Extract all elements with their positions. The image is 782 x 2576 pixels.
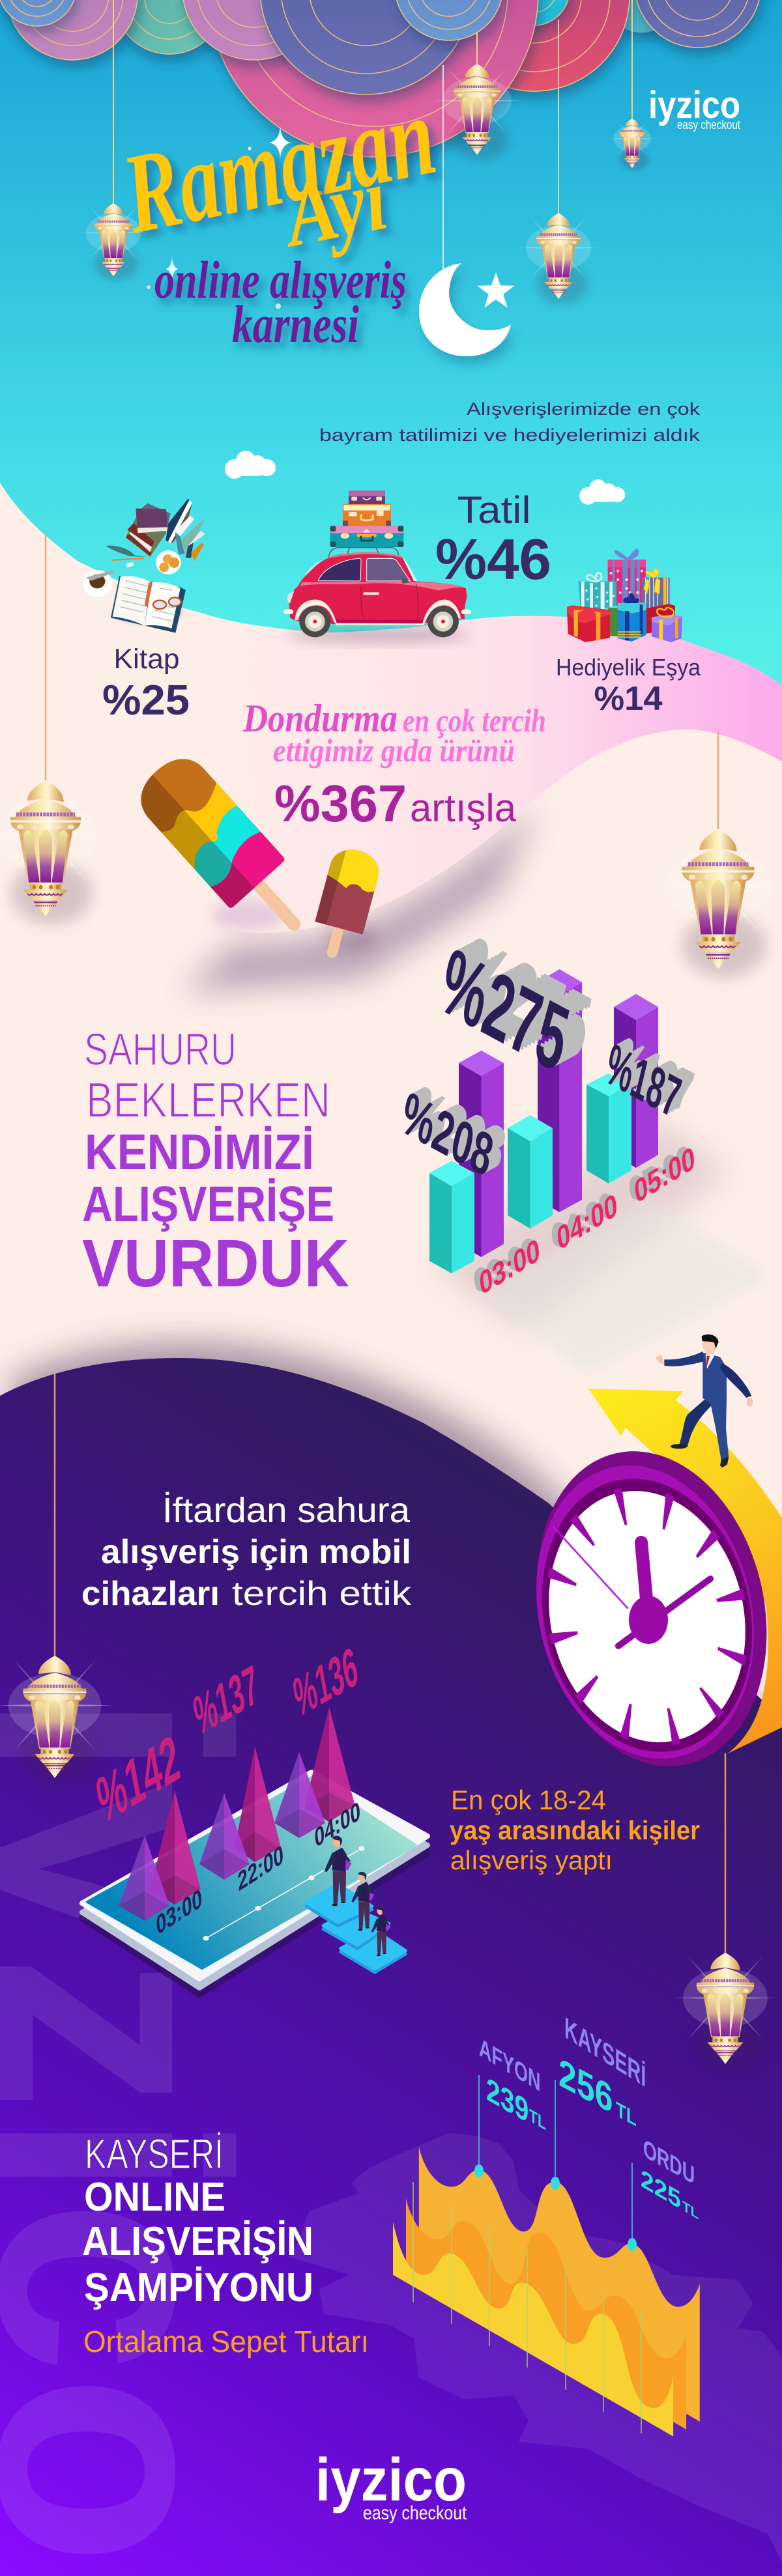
people on tiles [306, 1836, 406, 1972]
text block: age group: alışveriş yaptı [450, 1845, 613, 1875]
label: Kayseri: TL [616, 2097, 637, 2131]
label: Hediyelik Eşya: %14 [594, 680, 663, 718]
label: 04:00: 04:00 [555, 1186, 619, 1258]
label: Afyon: 239 [486, 2071, 529, 2130]
text block: ice cream stat: ettigimiz gıda ürünü [273, 732, 515, 769]
heading: sahur: KENDİMİZİ [85, 1124, 314, 1180]
label: Afyon [479, 2032, 546, 2134]
shadow: dark wave [10, 1341, 782, 1807]
title: online alışveriş [154, 250, 407, 309]
clock hands [553, 1527, 710, 1646]
red gift [567, 605, 610, 642]
icon: moon and star [419, 65, 515, 356]
front wave [393, 2222, 673, 2437]
phone body [82, 1772, 427, 1994]
pyramid purple front [119, 1835, 169, 1921]
icon: lantern 2 [433, 33, 521, 160]
label: Afyon: AFYON [479, 2032, 540, 2097]
icon: lantern right on wave [651, 731, 782, 978]
heading: Kayseri [82, 2130, 313, 2310]
label: Tatil: %46 [435, 527, 551, 591]
label: Kitap: %25 [102, 676, 190, 724]
value: %136: %136 [289, 1635, 362, 1729]
bar 05:00 purple [614, 994, 658, 1168]
icon: arrow [588, 1389, 782, 1753]
label: Kayseri [558, 2011, 646, 2131]
text block: ice cream stat: artışla [410, 786, 517, 830]
map silhouette [289, 2132, 782, 2562]
area chart: average basket [393, 2011, 700, 2437]
red back box [646, 604, 675, 634]
text block: iftar: İftardan sahura [162, 1491, 411, 1530]
label: Afyon: TL [529, 2106, 546, 2134]
heading: sahur: BEKLERKEN [86, 1073, 330, 1128]
text block: iftar: alışveriş için mobil [101, 1533, 411, 1571]
label: Ordu: ORDU [643, 2134, 695, 2190]
text block: ice cream stat: %367 [274, 774, 407, 832]
icon: books, coffee and glasses [83, 499, 205, 633]
icon: lantern left on wave [0, 534, 111, 924]
bar 04:00 teal [508, 1115, 553, 1228]
clock ticks [521, 1467, 774, 1766]
person 2 [351, 1872, 374, 1931]
label: Tatil [435, 489, 551, 591]
label: 03:00: 03:00 [155, 1882, 203, 1941]
value: %208: %208 [396, 1079, 499, 1190]
icon: popsicle large [141, 759, 301, 933]
guide lines [413, 2182, 641, 2433]
background wave: sky [0, 0, 782, 685]
title: karnesi [232, 294, 359, 354]
label: Ordu: TL [682, 2198, 699, 2222]
text block: age group: yaş arasındaki kişiler [450, 1815, 700, 1845]
text block: ice cream stat [242, 697, 546, 832]
value: %142: %142 [92, 1720, 184, 1838]
background wave: pink band [0, 391, 782, 933]
tile 1 [306, 1884, 372, 1926]
icon: popsicle small [315, 849, 379, 958]
shadow: pink wave [182, 806, 538, 992]
icon: lantern purple left [0, 1374, 113, 1785]
logo: iyzico bottom: easy checkout [363, 2502, 467, 2524]
value: %187: %187 [601, 1030, 686, 1131]
phone chart [82, 1635, 427, 1994]
bar 04:00 purple [538, 969, 582, 1212]
label: 04:00: 04:00 [313, 1795, 362, 1854]
label streaks [482, 1198, 769, 1374]
heading: sahur: SAHURU [84, 1024, 237, 1075]
icon: cloud right [579, 479, 625, 505]
icon: lantern 1 [79, 0, 148, 281]
green back box [608, 608, 621, 636]
teal star gift [579, 573, 616, 612]
heading: sahur: ALIŞVERİŞE [82, 1176, 334, 1232]
label: Hediyelik Eşya: Hediyelik Eşya [556, 654, 701, 681]
tile 3 [340, 1930, 406, 1972]
panel: dark purple background [0, 1358, 782, 2576]
bar 03:00 purple [459, 1051, 504, 1257]
label: Hediyelik Eşya [556, 654, 701, 718]
icon: businessman on arrow [656, 1335, 753, 1467]
car details [283, 552, 471, 625]
wheels [299, 606, 459, 637]
text block: iftar: cihazları [81, 1575, 220, 1613]
icon: red car with luggage [283, 490, 471, 643]
back wave [419, 2147, 700, 2422]
subtitle: Ortalama Sepet Tutarı [83, 2325, 369, 2358]
pyramid magenta mid [235, 1746, 281, 1862]
logo: iyzico top: iyzico [648, 84, 740, 126]
value: %275: %275 [432, 928, 577, 1092]
bar 05:00 teal [586, 1073, 631, 1183]
icon: cloud left [225, 451, 276, 479]
clock face [525, 1471, 770, 1762]
label: Tatil: Tatil [457, 489, 530, 531]
person 3 [371, 1907, 390, 1956]
heading: Kayseri: ŞAMPİYONU [84, 2265, 313, 2310]
heading: Kayseri: KAYSERİ [85, 2130, 224, 2177]
heading: Kayseri: ALIŞVERİŞİN [82, 2219, 313, 2264]
hanging paper circles [0, 0, 761, 157]
label: Kayseri: KAYSERİ [564, 2011, 646, 2094]
text block: iftar: tercih ettik [232, 1575, 412, 1613]
pyramid 04:00 front [274, 1752, 325, 1838]
value: %137: %137 [190, 1653, 262, 1747]
pyramid purple mid [199, 1793, 250, 1880]
bar chart: sahur hours [396, 928, 769, 1374]
label: Ordu: 225 [641, 2163, 681, 2215]
label: Ordu [641, 2134, 699, 2222]
pyramid magenta front [150, 1790, 201, 1904]
striped gift [642, 569, 670, 610]
text block: shopping intro: Alışverişlerimizde en çok [467, 399, 701, 419]
purple gift [652, 608, 682, 642]
icon: clock [506, 1428, 782, 1789]
dotted timeline [203, 1846, 365, 1941]
label: 05:00: 05:00 [632, 1139, 697, 1211]
text block: age group [450, 1785, 700, 1875]
icon: gift boxes [567, 548, 682, 642]
text block: shopping intro: bayram tatilimizi ve hediyelerimizi aldık [319, 425, 701, 445]
tile 2 [323, 1908, 389, 1949]
label: Kitap: Kitap [113, 644, 180, 675]
logo: iyzico bottom: iyzico [315, 2446, 467, 2513]
pins [474, 2075, 637, 2251]
blue gift [618, 593, 646, 642]
title: Ramazan [113, 71, 445, 257]
label: Kayseri: 256 [558, 2050, 613, 2123]
text block: age group: En çok 18-24 [451, 1785, 606, 1815]
text block: iftar [81, 1491, 412, 1613]
heading: sahur: VURDUK [82, 1226, 349, 1301]
icon: lantern purple right [672, 1753, 779, 2071]
heading: sahur [82, 1024, 349, 1301]
car body [289, 552, 467, 624]
pyramid 22:00 back [304, 1707, 355, 1822]
icon: sparkles [147, 127, 291, 309]
title: Ayı [272, 148, 395, 267]
person 1 [325, 1836, 351, 1906]
icon: lantern 3 [609, 0, 656, 171]
middle wave [406, 2198, 686, 2429]
label: 03:00: 03:00 [477, 1231, 542, 1303]
text block: ice cream stat: en çok tercih [403, 702, 546, 739]
luggage stack [330, 490, 403, 547]
text block: shopping intro [319, 399, 701, 445]
icon: lantern 4 [517, 20, 600, 304]
pink dotted gift [608, 548, 646, 606]
title [113, 71, 445, 354]
heading: Kayseri: ONLINE [84, 2175, 225, 2220]
bar 03:00 teal [429, 1161, 474, 1273]
logo: iyzico top: easy checkout [677, 119, 741, 132]
roof rack [328, 548, 399, 558]
bar shadows [430, 1120, 730, 1329]
text block: ice cream stat: Dondurma [242, 697, 398, 740]
label: Kitap [102, 644, 190, 724]
label: 22:00: 22:00 [237, 1839, 285, 1897]
